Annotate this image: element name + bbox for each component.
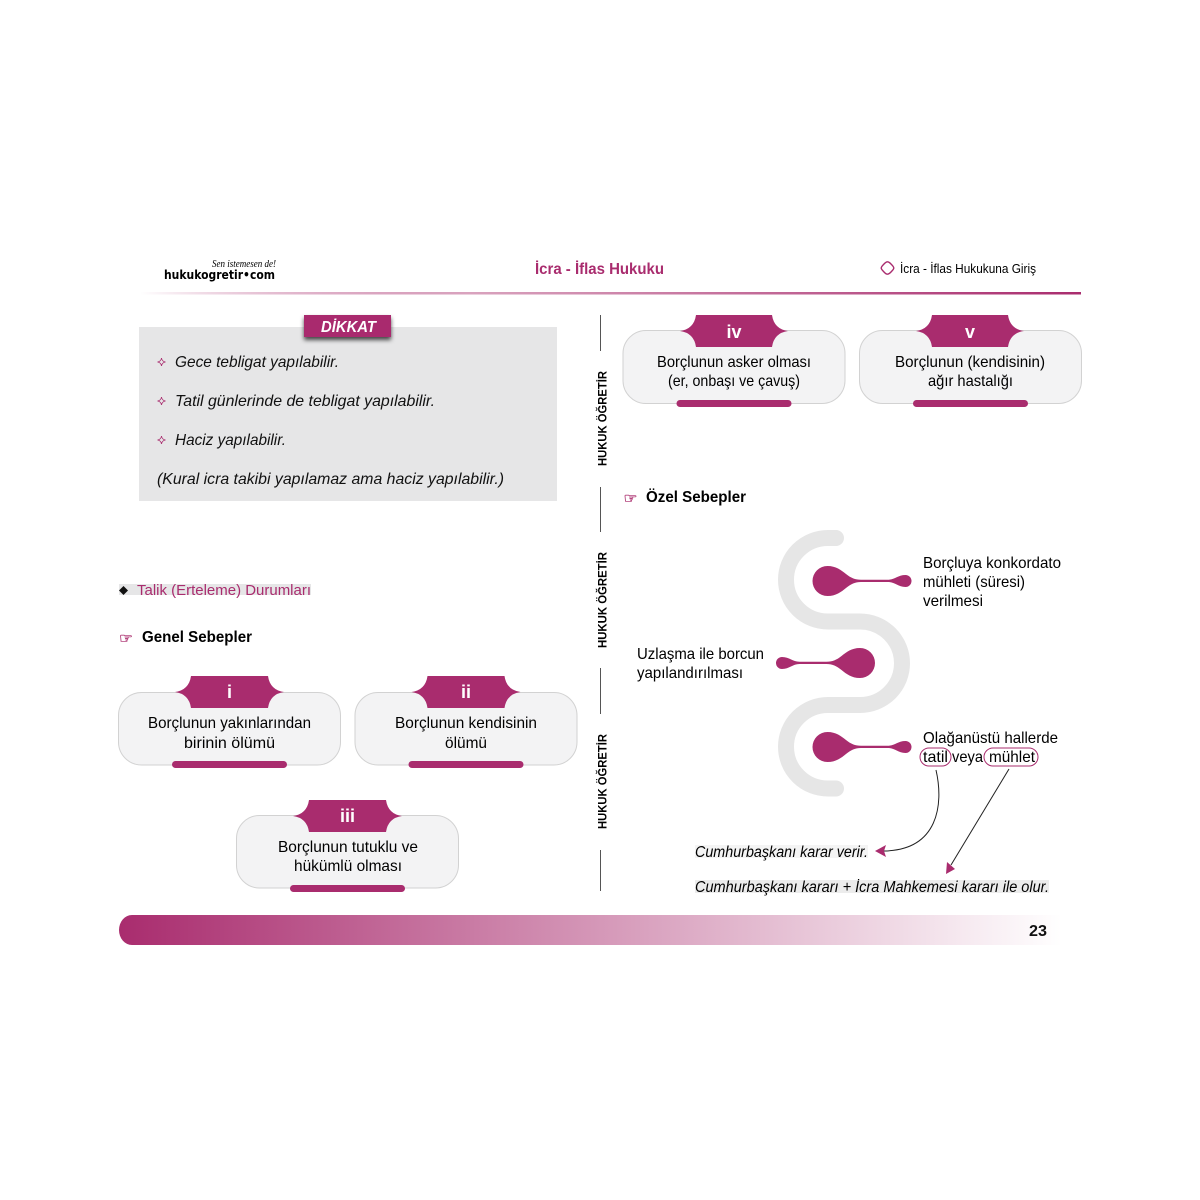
dikkat tab: DİKKAT	[321, 318, 377, 336]
card i: birinin ölümü	[184, 735, 275, 752]
arrow: mühlet to karar	[946, 769, 1009, 874]
card i	[118, 676, 340, 768]
vertical divider: HUKUK ÖĞRETİR	[596, 551, 610, 648]
heading: özel sebepler	[624, 487, 746, 507]
dikkat tab	[304, 315, 391, 337]
label 3: mühlet	[989, 749, 1036, 766]
card v: Borçlunun (kendisinin)	[895, 354, 1045, 371]
label 3	[920, 730, 1058, 766]
header rule	[140, 292, 1081, 294]
note 1: Gece tebligat yapılabilir.	[175, 354, 339, 371]
pin 2	[776, 648, 875, 678]
result 2: Cumhurbaşkanı kararı + İcra Mahkemesi kararı ile olur.	[695, 879, 1049, 896]
card ii	[355, 676, 577, 768]
card iv: iv	[726, 322, 742, 342]
card ii: ii	[461, 682, 471, 702]
result 1: Cumhurbaşkanı karar verir.	[695, 844, 868, 861]
pin 3	[812, 732, 912, 762]
panel background	[139, 327, 557, 501]
card v: v	[965, 322, 975, 342]
card iv: Borçlunun asker olması	[657, 354, 811, 371]
section title: İcra - İflas Hukukuna Giriş	[900, 261, 1036, 276]
card ii: ölümü	[445, 735, 487, 752]
header	[140, 258, 1081, 294]
footer bar	[119, 915, 1062, 945]
book title: İcra - İflas Hukuku	[535, 261, 664, 278]
heading: genel sebepler: Genel Sebepler	[142, 629, 252, 646]
card iv	[623, 315, 845, 407]
card iii: hükümlü olması	[294, 858, 402, 875]
s-curve path	[786, 538, 902, 788]
note 4: (Kural icra takibi yapılamaz ama haciz yapılabilir.)	[157, 471, 504, 488]
panel: dikkat	[139, 315, 557, 501]
vertical divider: HUKUK ÖĞRETİR	[596, 370, 610, 466]
heading: özel sebepler: ☞	[624, 491, 638, 507]
card iii: Borçlunun tutuklu ve	[278, 839, 418, 856]
label 1: mühleti (süresi)	[923, 574, 1025, 591]
card iii	[236, 800, 458, 892]
page number: 23	[1029, 923, 1047, 940]
label 3: veya	[952, 749, 983, 766]
label 1: verilmesi	[923, 593, 983, 610]
arrow: tatil to karar	[875, 770, 939, 857]
label 3: Olağanüstü hallerde	[923, 730, 1058, 747]
label 2: Uzlaşma ile borcun	[637, 646, 764, 663]
card iii: iii	[340, 806, 355, 826]
label 1	[923, 555, 1061, 610]
logo	[164, 258, 276, 282]
card i: Borçlunun yakınlarından	[148, 715, 311, 732]
note 2: Tatil günlerinde de tebligat yapılabilir.	[175, 393, 435, 410]
card i: i	[227, 682, 232, 702]
s-curve diagram	[637, 538, 1061, 788]
note 3: Haciz yapılabilir.	[175, 432, 286, 449]
logo: hukukogretir•com	[164, 267, 275, 282]
label 2: yapılandırılması	[637, 665, 743, 682]
heading: genel sebepler: ☞	[119, 631, 133, 647]
label 1: Borçluya konkordato	[923, 555, 1061, 572]
card ii: Borçlunun kendisinin	[395, 715, 537, 732]
pin 1	[812, 566, 912, 596]
label 3: tatil	[923, 749, 948, 766]
section marker icon	[881, 262, 894, 274]
card v: ağır hastalığı	[928, 373, 1013, 390]
heading: özel sebepler: Özel Sebepler	[646, 487, 746, 506]
vertical divider	[596, 315, 610, 891]
vertical divider: HUKUK ÖĞRETİR	[596, 733, 610, 829]
card iv: (er, onbaşı ve çavuş)	[668, 373, 800, 390]
label 2	[637, 646, 764, 682]
card v	[860, 315, 1082, 407]
logo: Sen istemesen de!	[212, 258, 276, 270]
heading: talik: Talik (Erteleme) Durumları	[137, 582, 311, 599]
